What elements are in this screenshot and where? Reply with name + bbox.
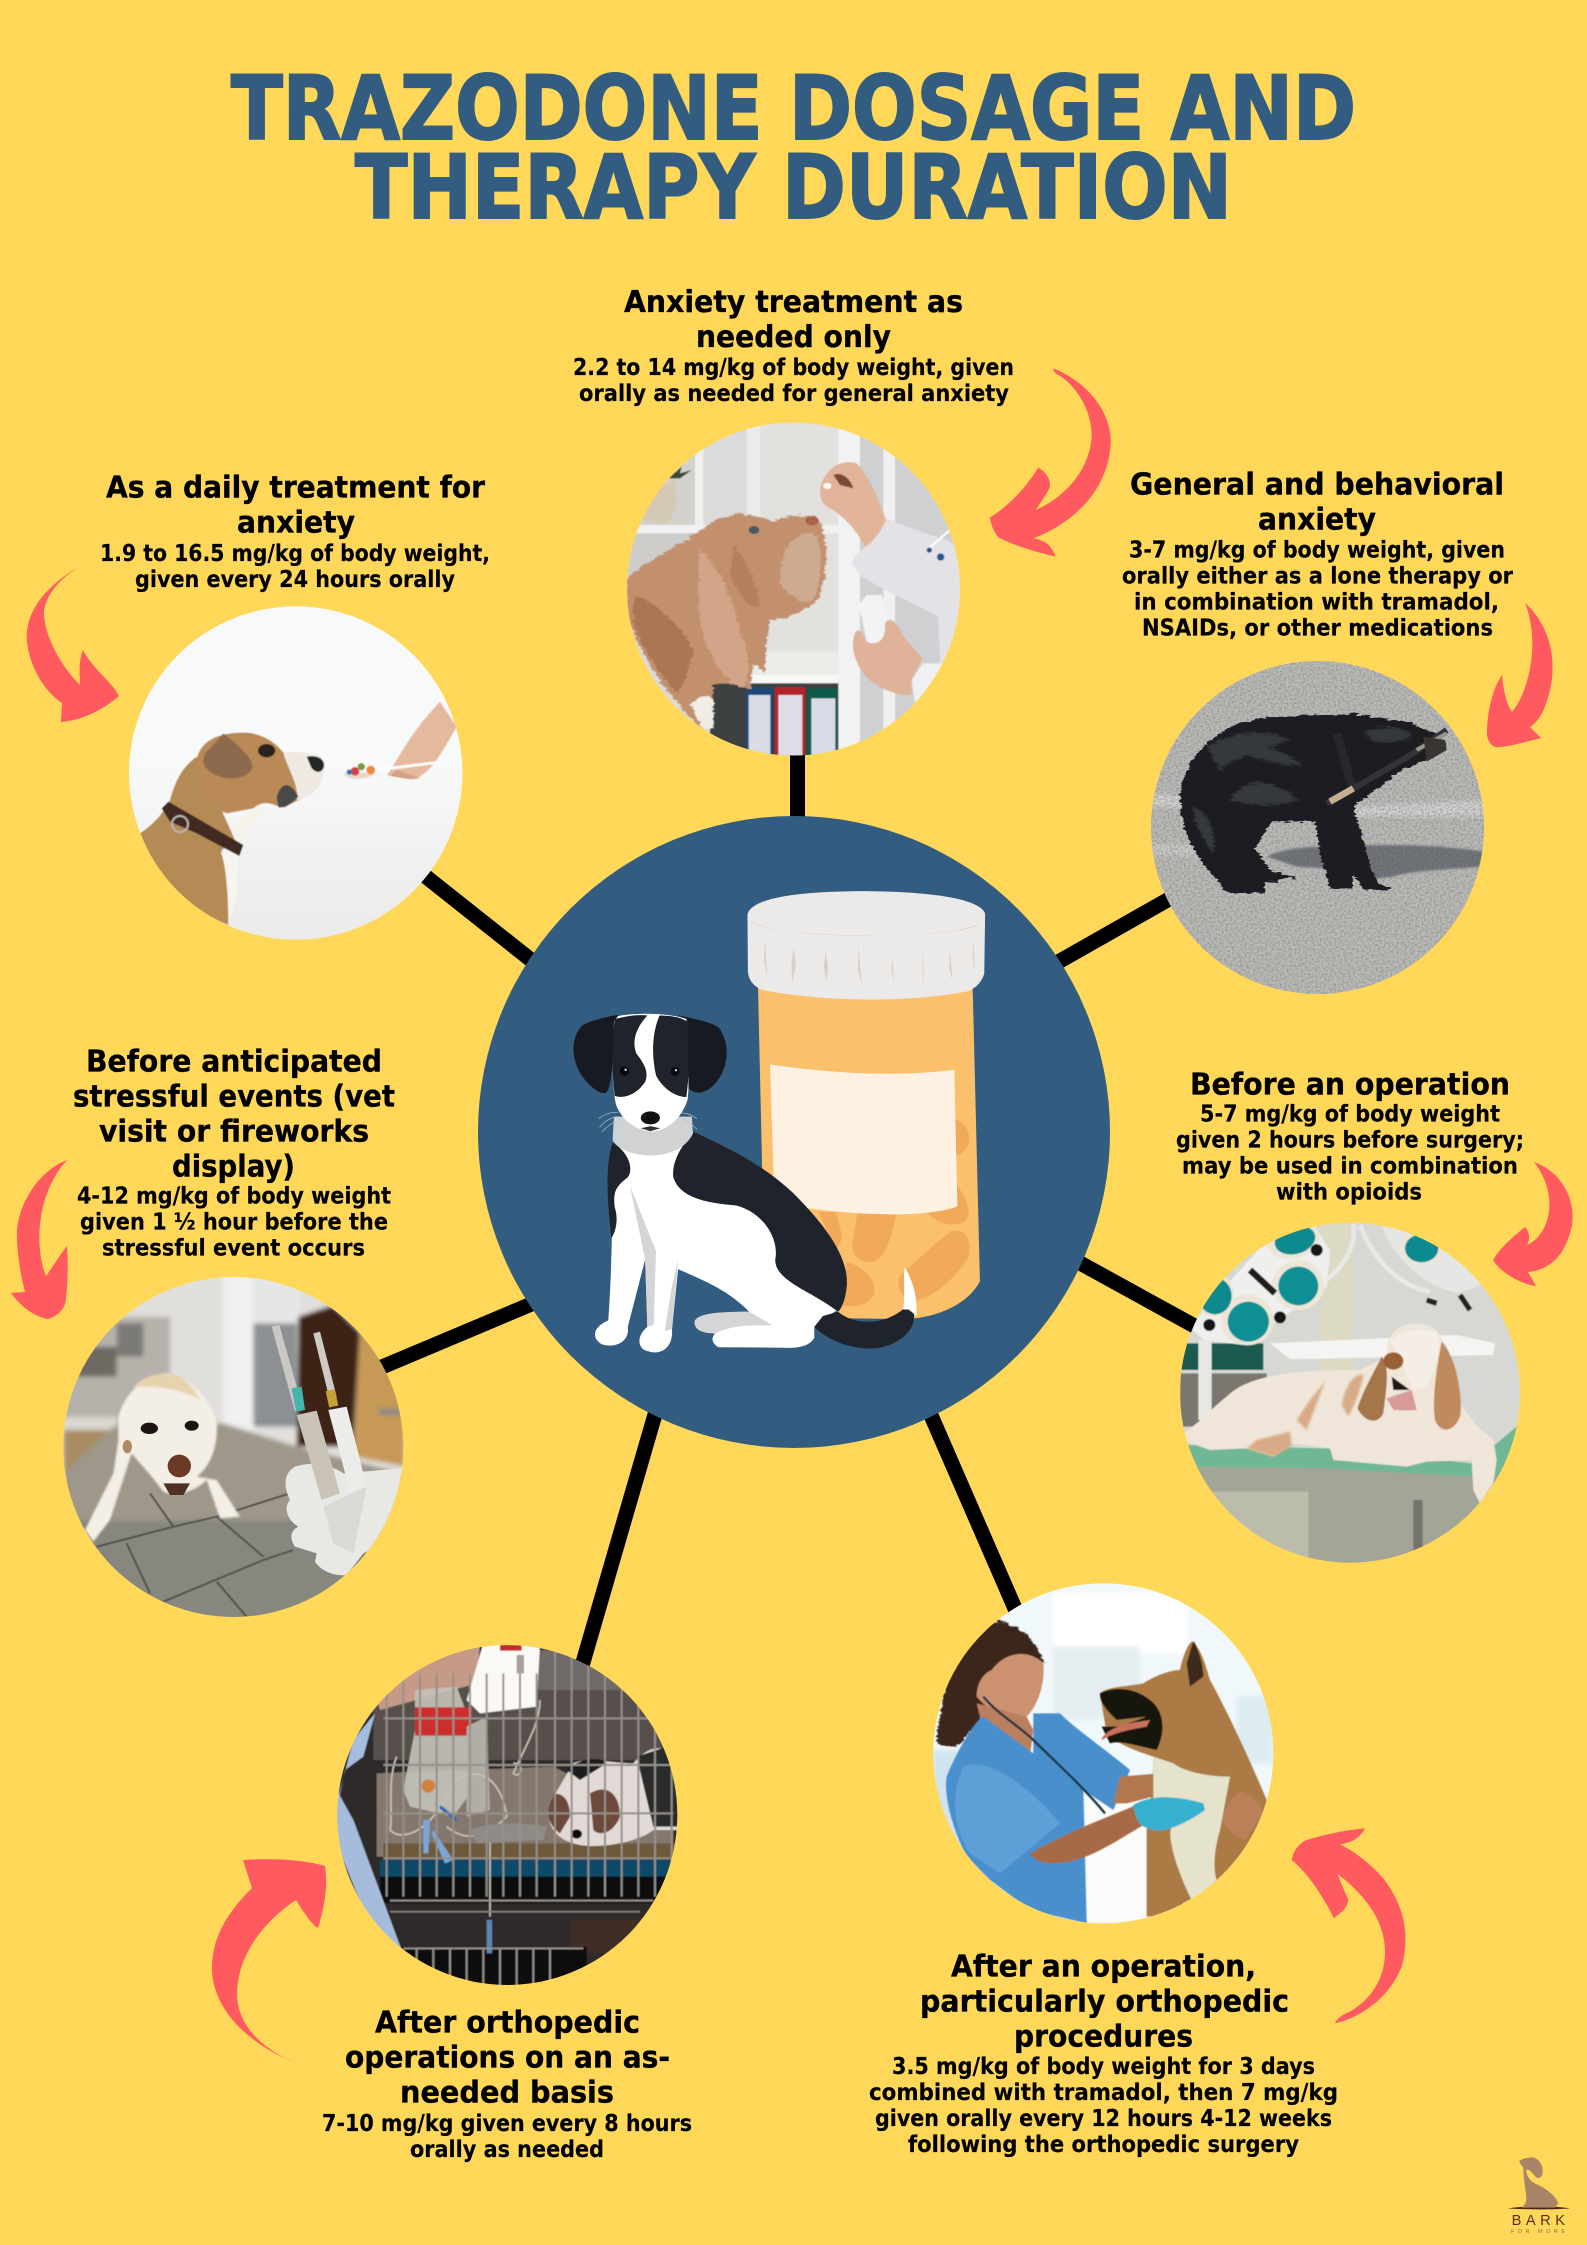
heading [920,1950,1289,2054]
photo: recovering dog in cage with IV drip [337,1645,678,1985]
heading: Before an operation [1190,1068,1510,1102]
dosage text [573,353,1014,407]
dosage text: with opioids [1276,1178,1422,1206]
panel: after an operation, particularly orthopedic procedures [869,1570,1405,2158]
dosage text: NSAIDs, or other medications [1142,614,1493,642]
heading: Before anticipated [86,1044,382,1080]
central hub: dog and pill bottle [478,816,1110,1448]
photo: dog and spoon of pills [129,606,462,940]
dosage text: combined with tramadol, then 7 mg/kg [869,2078,1338,2106]
dosage text [1176,1100,1524,1206]
heading: anxiety [237,506,355,540]
logo wordmark: BARK [1512,2213,1565,2229]
logo wordmark: FOR MORE [1511,2229,1565,2235]
arrow [212,1859,326,2063]
dosage text: orally as needed for general anxiety [579,379,1009,407]
panel: daily treatment for anxiety [27,470,490,960]
panel: before anticipated stressful events [11,1048,404,1617]
dosage text: orally as needed [410,2135,604,2163]
heading: As a daily treatment for [106,470,485,506]
dosage text: 3-7 mg/kg of body weight, given [1129,536,1505,564]
dosage text: 5-7 mg/kg of body weight [1200,1100,1500,1128]
dosage text: 2.2 to 14 mg/kg of body weight, given [573,353,1014,381]
dosage text [100,539,490,593]
title: TRAZODONE DOSAGE AND [231,57,1356,160]
photo: vet examining dog [933,1583,1274,1924]
panel: general and behavioral anxiety [1122,468,1553,1020]
photo: black dog pulling on leash [1151,661,1484,994]
photo: basset hound on operating table [1180,1222,1520,1563]
dosage text: 4-12 mg/kg of body weight [77,1182,391,1210]
heading: display) [172,1150,295,1184]
dosage text: 7-10 mg/kg given every 8 hours [322,2109,692,2137]
arrow [1292,1828,1405,2023]
dosage text: given every 24 hours orally [135,565,455,593]
heading: After an operation, [951,1950,1256,1984]
arrow [990,368,1111,557]
dosage text [1122,536,1513,642]
heading: anxiety [1258,502,1376,538]
dosage text [77,1182,391,1262]
dosage text: 1.9 to 16.5 mg/kg of body weight, [100,539,490,567]
panel: after orthopedic operations on an as-needed basis [212,1630,700,2163]
heading: General and behavioral [1130,468,1504,502]
puppy [573,1014,917,1352]
logo: Bark For More [1507,2157,1570,2235]
heading [1130,468,1504,538]
photo: vet offering pill to shaggy dog [627,422,960,756]
dosage text: in combination with tramadol, [1134,588,1499,616]
arrow [1487,603,1553,747]
arrow [27,565,119,722]
heading: Anxiety treatment as [624,285,963,320]
dosage text [869,2052,1338,2158]
heading [106,470,485,540]
dosage text: may be used in combination [1182,1152,1518,1180]
heading: needed basis [400,2076,614,2110]
dosage text: stressful event occurs [102,1234,365,1262]
heading: After orthopedic [375,2006,640,2040]
dosage text: given orally every 12 hours 4-12 weeks [875,2104,1332,2132]
dosage text [322,2109,692,2163]
panel: before an operation [1160,1068,1573,1580]
heading: particularly orthopedic [920,1984,1289,2020]
heading [345,2006,670,2110]
heading [73,1044,395,1184]
heading: stressful events (vet [73,1080,395,1114]
photo: dog and syringes [63,1277,404,1617]
pill bottle [747,891,985,1319]
title: THERAPY DURATION [355,136,1232,239]
heading: visit or fireworks [99,1114,369,1150]
arrow [11,1160,68,1319]
dosage text: following the orthopedic surgery [908,2130,1299,2158]
title [231,57,1356,239]
connector lines from hub to photos [370,745,1200,1690]
heading: operations on an as- [345,2040,670,2076]
dosage text: 3.5 mg/kg of body weight for 3 days [892,2052,1315,2080]
dosage text: orally either as a lone therapy or [1122,562,1513,590]
panel: anxiety treatment as needed only [573,285,1111,770]
heading [624,285,963,355]
dosage text: given 2 hours before surgery; [1176,1126,1524,1154]
dosage text: given 1 ½ hour before the [80,1208,388,1236]
heading: needed only [696,320,891,355]
arrow [1493,1162,1573,1286]
heading: procedures [1014,2020,1193,2054]
